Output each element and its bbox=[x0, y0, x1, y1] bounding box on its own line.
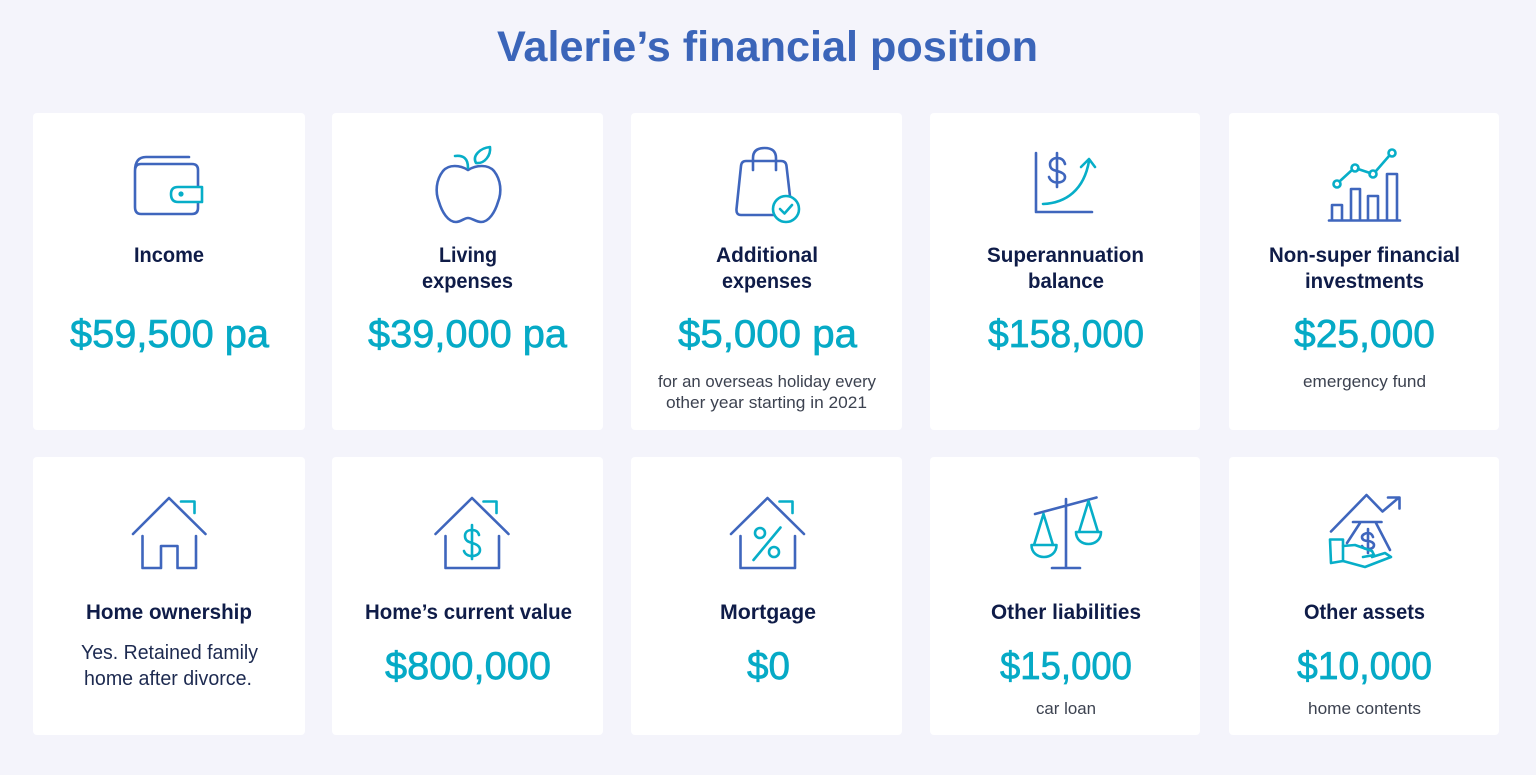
title: Valerie’s financial position bbox=[497, 23, 1038, 71]
icon: apple bbox=[437, 147, 500, 222]
heading: expenses bbox=[722, 270, 812, 293]
value: $158,000 bbox=[988, 313, 1144, 356]
heading bbox=[987, 244, 1144, 293]
value: $5,000 pa bbox=[678, 313, 857, 356]
value: $25,000 bbox=[1294, 313, 1435, 356]
icon: house with percent bbox=[731, 498, 804, 568]
heading: Living bbox=[439, 244, 497, 267]
heading: Other assets bbox=[1304, 601, 1425, 624]
heading bbox=[422, 244, 513, 293]
heading: Home’s current value bbox=[365, 601, 572, 624]
panel: superannuation balance bbox=[930, 113, 1200, 430]
heading: Additional bbox=[716, 244, 818, 267]
note bbox=[81, 642, 258, 690]
heading: Home ownership bbox=[86, 601, 252, 624]
value: $0 bbox=[747, 645, 790, 688]
panel: living expenses bbox=[332, 113, 603, 430]
note bbox=[658, 372, 876, 412]
panel: non-super financial investments bbox=[1229, 113, 1499, 430]
value: $39,000 pa bbox=[368, 313, 567, 356]
note: home contents bbox=[1308, 699, 1421, 718]
heading bbox=[716, 244, 818, 293]
note: for an overseas holiday every bbox=[658, 372, 876, 391]
note: car loan bbox=[1036, 699, 1096, 718]
icon: wallet bbox=[135, 157, 202, 214]
icon: shopping bag with check bbox=[736, 148, 799, 222]
heading: balance bbox=[1028, 270, 1104, 293]
panel: other liabilities bbox=[930, 457, 1200, 735]
icon: house with door bbox=[133, 498, 206, 568]
panel: home's current value bbox=[332, 457, 603, 735]
heading: expenses bbox=[422, 270, 513, 293]
value: $15,000 bbox=[1000, 645, 1132, 688]
icon: growth chart with dollar bbox=[1036, 153, 1095, 212]
note: other year starting in 2021 bbox=[666, 393, 867, 412]
heading: Non-super financial bbox=[1269, 244, 1460, 267]
heading: Superannuation bbox=[987, 244, 1144, 267]
note: home after divorce. bbox=[84, 668, 252, 690]
heading: Other liabilities bbox=[991, 601, 1141, 624]
panel: other assets bbox=[1229, 457, 1499, 735]
panel: income bbox=[33, 113, 305, 430]
heading: investments bbox=[1305, 270, 1424, 293]
icon: balance scales bbox=[1032, 498, 1101, 568]
panel: home ownership bbox=[33, 457, 305, 735]
note: Yes. Retained family bbox=[81, 642, 258, 664]
heading bbox=[1269, 244, 1460, 293]
value: $59,500 pa bbox=[70, 313, 269, 356]
icon: bar and line chart bbox=[1329, 150, 1400, 220]
panel: mortgage bbox=[631, 457, 902, 735]
panel: additional expenses bbox=[631, 113, 902, 430]
value: $10,000 bbox=[1297, 645, 1432, 688]
note: emergency fund bbox=[1303, 372, 1426, 391]
heading: Mortgage bbox=[720, 601, 816, 624]
heading: Income bbox=[134, 244, 204, 267]
icon: hand holding money bag bbox=[1330, 495, 1400, 567]
value: $800,000 bbox=[385, 645, 551, 688]
icon: house with dollar bbox=[436, 498, 508, 568]
